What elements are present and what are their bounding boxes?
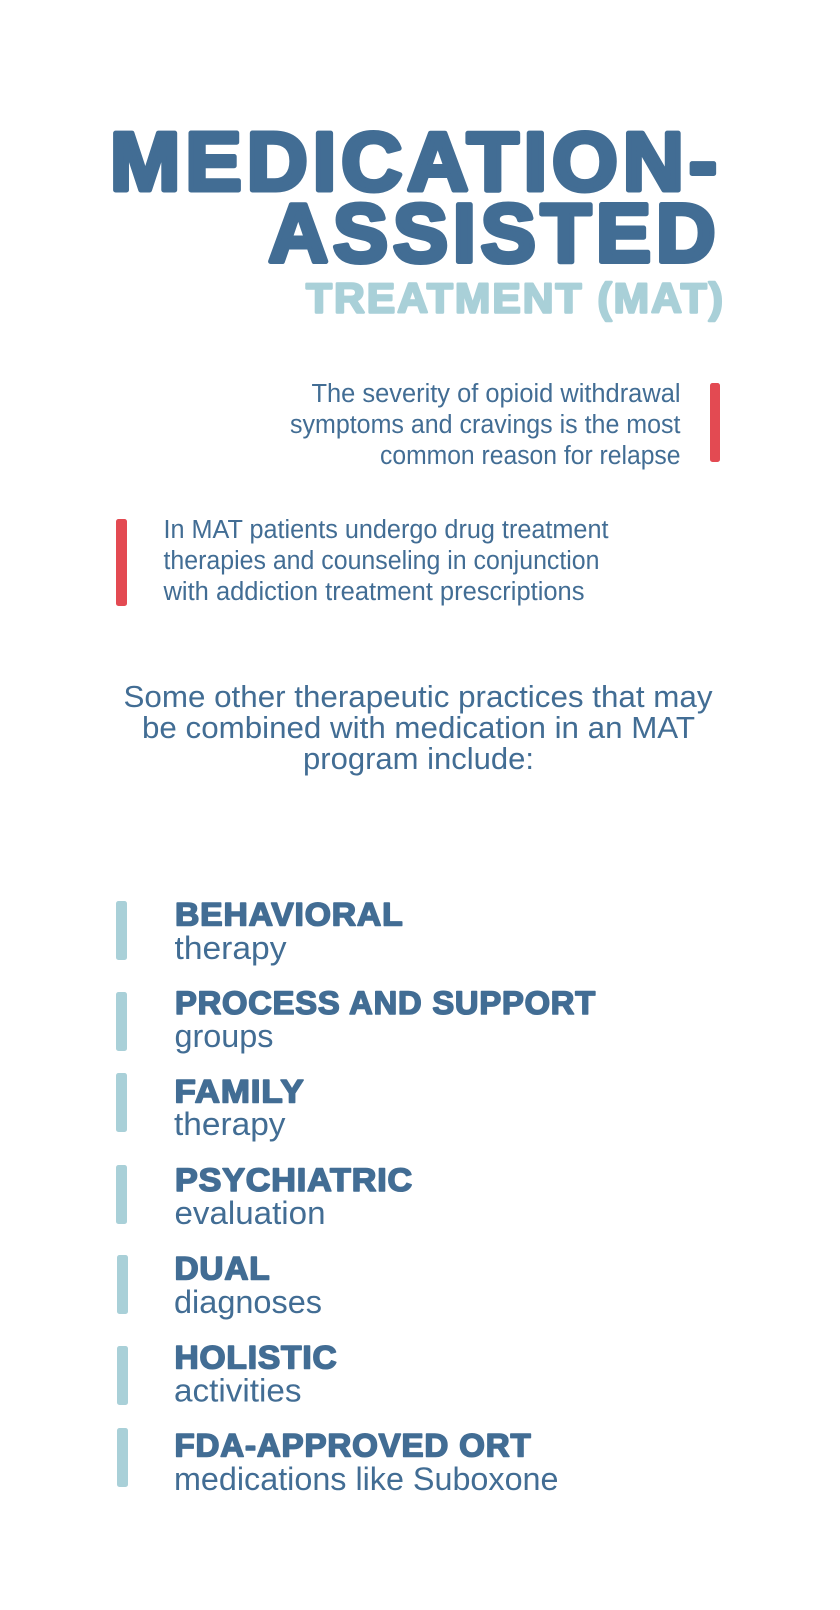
list of practices [116, 896, 596, 1497]
title line: Assisted: ASSISTED [268, 186, 720, 280]
item: dual diagnoses: diagnoses [174, 1284, 322, 1320]
callout: withdrawal and relapse [290, 380, 720, 470]
item: behavioral therapy [116, 896, 404, 966]
item: process and support groups [116, 985, 596, 1054]
callout text: common reason for relapse [380, 442, 680, 470]
intro paragraph [124, 679, 713, 776]
item: holistic activities [117, 1340, 338, 1408]
callout text: The severity of opioid withdrawal [312, 380, 680, 408]
item: psychiatric evaluation: evaluation [174, 1195, 326, 1231]
item: dual diagnoses: DUAL [174, 1250, 270, 1286]
title [110, 115, 725, 322]
callout text: with addiction treatment prescriptions [162, 578, 585, 606]
item: FDA-approved ORT medications: medications like Suboxone [174, 1461, 558, 1497]
item: family therapy: therapy [174, 1106, 286, 1142]
item: family therapy: FAMILY [174, 1074, 304, 1110]
title line: Medication-: MEDICATION- [110, 115, 722, 208]
red accent bar [116, 519, 127, 606]
callout: MAT definition [116, 516, 608, 606]
item: behavioral therapy: therapy [174, 930, 286, 966]
callout text: therapies and counseling in conjunction [164, 547, 600, 575]
item: process and support groups: PROCESS AND SUPPORT [175, 985, 596, 1021]
item: FDA-approved ORT medications: FDA-APPROVED ORT [174, 1428, 532, 1464]
red accent bar [710, 383, 720, 462]
item: FDA-approved ORT medications [117, 1428, 558, 1497]
item: process and support groups: groups [174, 1018, 274, 1054]
intro paragraph: program include: [303, 741, 534, 776]
intro paragraph: Some other therapeutic practices that may [124, 679, 713, 714]
callout text: symptoms and cravings is the most [290, 411, 680, 439]
item: holistic activities: HOLISTIC [174, 1340, 338, 1376]
item: psychiatric evaluation: PSYCHIATRIC [175, 1162, 413, 1198]
item: behavioral therapy: BEHAVIORAL [175, 896, 404, 932]
callout text [290, 380, 680, 470]
item: dual diagnoses [117, 1250, 322, 1320]
callout text: In MAT patients undergo drug treatment [164, 516, 608, 544]
subtitle: TREATMENT (MAT) [306, 274, 725, 322]
callout text [162, 516, 609, 606]
item: holistic activities: activities [174, 1372, 302, 1408]
intro paragraph: be combined with medication in an MAT [142, 710, 695, 745]
item: family therapy [116, 1073, 304, 1142]
item: psychiatric evaluation [116, 1162, 413, 1231]
